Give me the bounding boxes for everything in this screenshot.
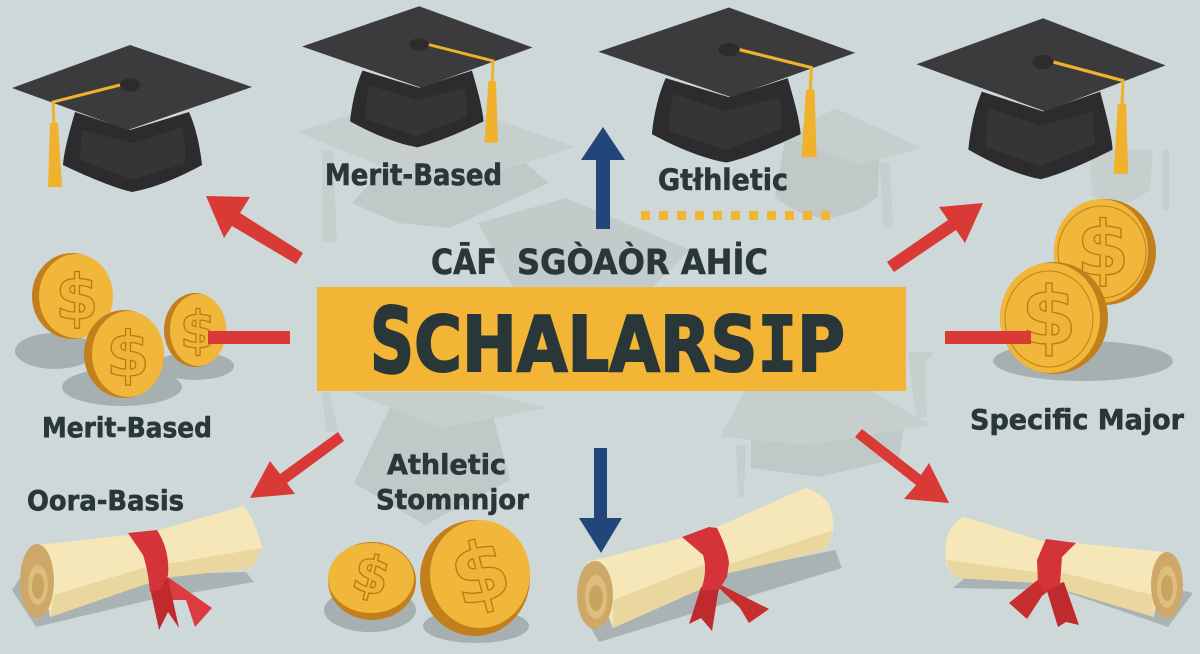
coins: right group: [993, 199, 1173, 381]
red bar: right: [945, 331, 1031, 344]
dotted line: [641, 211, 830, 220]
label: Oora-Basis: Oora-Basis: [27, 484, 184, 517]
icon: graduation cap 4: [916, 18, 1166, 179]
title banner: CHALARSIP: [414, 301, 845, 390]
coins: left group: [15, 253, 234, 406]
icon: graduation cap 3: [598, 7, 855, 163]
arrow: red upper left: [206, 196, 303, 264]
coins: left group: $: [106, 318, 150, 391]
faint background caps: [297, 92, 1169, 525]
label: Athletic Stomnnjor: Athletic: [387, 448, 506, 481]
label: Merit-Based left: Merit-Based: [42, 411, 212, 444]
arrow: red lower right: [855, 429, 949, 503]
coins: right group: $: [1077, 204, 1129, 293]
red bar: left: [208, 331, 290, 344]
coins: bottom pair: $: [440, 520, 520, 627]
label: Merit-Based top: Merit-Based: [325, 158, 502, 192]
title banner: [317, 287, 906, 394]
coins: right group: $: [1021, 270, 1077, 363]
coins: left group: $: [180, 301, 216, 361]
label: Specific Major: Specific Major: [970, 403, 1184, 436]
label: Athletic Stomnnjor: Stomnnjor: [376, 483, 529, 516]
icon: diploma left: [12, 506, 262, 630]
coins: bottom pair: [324, 520, 530, 643]
subtitle: SGÒAÒR AHİC: [517, 241, 768, 283]
arrow: blue up: [581, 127, 625, 229]
subtitle: [431, 241, 768, 283]
label: Gthletic: Gtłhletic: [658, 163, 788, 197]
label: Athletic Stomnnjor: [376, 448, 529, 516]
icon: graduation cap 2: [302, 6, 532, 147]
subtitle: CĀF: [431, 241, 497, 283]
icon: graduation cap 1: [12, 45, 252, 192]
arrow: red upper right: [887, 203, 983, 272]
title banner: S: [370, 289, 414, 394]
coins: left group: $: [55, 261, 99, 334]
arrow: red lower left: [250, 432, 344, 498]
arrow: blue down: [579, 448, 622, 553]
icon: diploma middle: [577, 488, 842, 642]
coins: bottom pair: $: [346, 542, 397, 610]
icon: diploma right: [946, 517, 1193, 627]
